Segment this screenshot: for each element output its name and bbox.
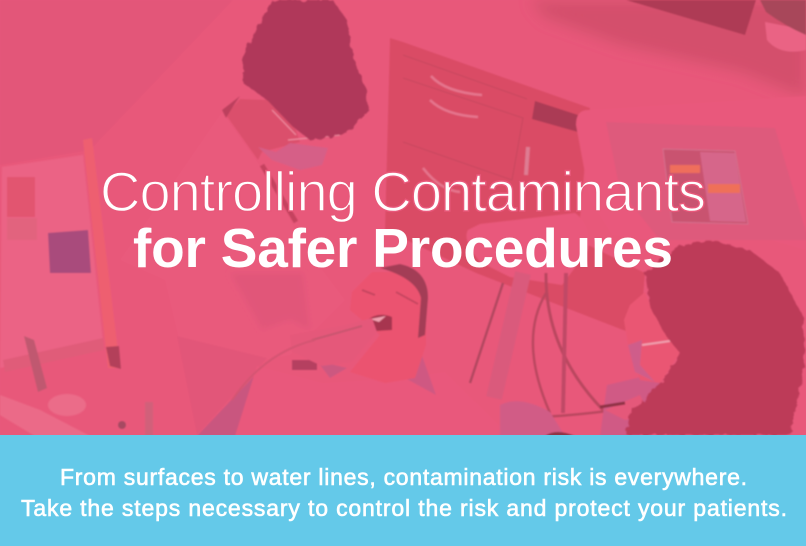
message line 1: From surfaces to water lines, contamination risk is everywhere. bbox=[60, 464, 747, 490]
panel: blue message band bbox=[0, 435, 806, 546]
assistant curly hair bbox=[626, 240, 805, 435]
assistant arm and gown bbox=[500, 375, 665, 436]
cabinet bbox=[385, 38, 645, 335]
dental handpieces bbox=[0, 336, 153, 436]
dentist coat bbox=[120, 112, 345, 436]
assistant face and mask bbox=[624, 292, 680, 383]
dentist curly hair bbox=[243, 0, 368, 140]
panel: tinted dental photo bbox=[0, 0, 806, 436]
top right desk shadow bbox=[530, 0, 806, 98]
instrument tray panel bbox=[576, 96, 806, 250]
dentist face and mask bbox=[222, 96, 340, 170]
left equipment panel bbox=[0, 138, 121, 372]
dental chair headrest bbox=[466, 213, 589, 285]
title line 1: Controlling Contaminants bbox=[100, 160, 706, 223]
title line 2: for Safer Procedures bbox=[133, 217, 673, 279]
plant pot bbox=[760, 0, 806, 52]
monitor bbox=[626, 0, 756, 35]
message line 2: Take the steps necessary to control the risk and protect your patients. bbox=[21, 495, 787, 521]
title: Controlling Contaminants for Safer Procedures bbox=[100, 160, 706, 279]
patient gown and bib bbox=[197, 350, 510, 436]
patient face bbox=[350, 264, 428, 383]
dentist gloved hand bbox=[232, 318, 377, 400]
instrument cassette bbox=[663, 149, 748, 224]
hoses and pole bbox=[470, 273, 622, 418]
